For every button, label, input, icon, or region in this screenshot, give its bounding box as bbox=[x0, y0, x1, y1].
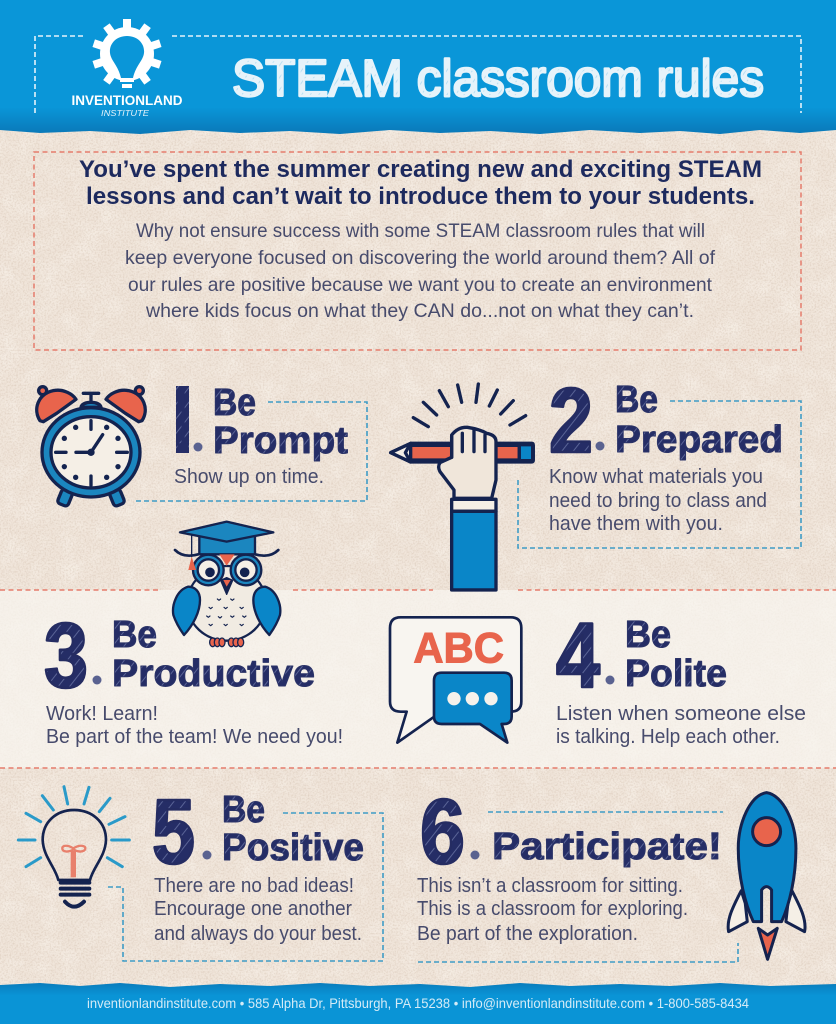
rule 3 heading bbox=[112, 614, 315, 695]
rule 3 heading: Be bbox=[112, 614, 157, 656]
panel: rule 1 bbox=[37, 367, 367, 507]
rule 6 text: Be part of the exploration. bbox=[417, 923, 638, 945]
intro body: where kids focus on what they CAN do...not on what they can’t. bbox=[145, 300, 694, 322]
rule 5 text: and always do your best. bbox=[154, 923, 362, 945]
rule 1 heading: Be bbox=[213, 382, 256, 424]
rule 2 heading: Be bbox=[615, 379, 658, 421]
panel: rule 1: 1 bbox=[176, 367, 189, 474]
logo wordmark: INVENTIONLAND bbox=[72, 92, 182, 108]
intro body: Why not ensure success with some STEAM classroom rules that will bbox=[136, 220, 705, 242]
rule 3 text: Be part of the team! We need you! bbox=[46, 726, 343, 748]
rule 2 numeral: 2 bbox=[549, 370, 593, 472]
rule 4 text: is talking. Help each other. bbox=[556, 726, 780, 748]
intro body: our rules are positive because we want you to create an environment bbox=[128, 274, 713, 296]
section dividers bbox=[0, 590, 836, 768]
rule 6 text: This isn’t a classroom for sitting. bbox=[417, 875, 683, 897]
rule 1 text: Show up on time. bbox=[174, 466, 324, 488]
rule 3 text bbox=[46, 703, 343, 748]
icon: rocket bbox=[728, 793, 805, 959]
intro body: keep everyone focused on discovering the world around them? All of bbox=[125, 247, 716, 269]
rule 6 numeral: 6 bbox=[420, 781, 465, 883]
header banner bbox=[0, 0, 836, 134]
icon: alarm clock bbox=[37, 387, 145, 507]
panel: rule 5 bbox=[18, 781, 383, 961]
rule 1 heading: Prompt bbox=[213, 420, 348, 462]
rule 4 heading: Polite bbox=[625, 653, 727, 695]
icon: owl with graduation cap bbox=[173, 522, 280, 647]
rule 3 text: Work! Learn! bbox=[46, 703, 158, 725]
panel: rule 3 bbox=[44, 605, 343, 748]
rule 5 heading bbox=[222, 789, 364, 869]
rule 5 numeral: 5 bbox=[152, 781, 195, 883]
icon: speech bubbles bbox=[390, 617, 521, 743]
icon: speech bubbles: ABC bbox=[413, 625, 504, 672]
panel: rule 6 bbox=[417, 781, 805, 962]
rule 2 text bbox=[549, 466, 767, 535]
footer band bbox=[0, 983, 836, 1024]
rule 2 text: need to bring to class and bbox=[549, 490, 767, 512]
rule 6 text bbox=[417, 875, 688, 945]
rule 4 heading bbox=[625, 614, 727, 695]
logo: INSTITUTE bbox=[101, 108, 149, 118]
intro body bbox=[125, 220, 716, 322]
rule 5 text: Encourage one another bbox=[154, 898, 352, 920]
rule 5 text bbox=[154, 875, 362, 945]
icon: gear with lightbulb bbox=[92, 19, 162, 88]
rule 5 heading: Be bbox=[222, 789, 265, 831]
rule 5 heading: Positive bbox=[222, 827, 364, 869]
rule 1 numeral bbox=[176, 367, 202, 474]
rule 2 text: Know what materials you bbox=[549, 466, 763, 488]
rule 2 heading bbox=[615, 379, 783, 461]
panel: rule 2 bbox=[391, 370, 801, 590]
title: STEAM classroom rules bbox=[232, 50, 764, 108]
rule 4 text bbox=[556, 703, 806, 748]
rule 4 numeral: 4 bbox=[556, 605, 600, 707]
footer contact text: inventionlandinstitute.com • 585 Alpha Dr, Pittsburgh, PA 15238 • info@inventionlandinstitute.com • 1-800-585-8434 bbox=[87, 995, 749, 1011]
rule 4 text: Listen when someone else bbox=[556, 703, 806, 725]
rule 2 text: have them with you. bbox=[549, 513, 723, 535]
rule 5 text: There are no bad ideas! bbox=[154, 875, 354, 897]
logo bbox=[72, 19, 182, 118]
rule 6 text: This is a classroom for exploring. bbox=[417, 898, 688, 920]
icon: hand holding pencil bbox=[391, 384, 533, 590]
panel: introduction bbox=[34, 152, 801, 350]
header dashed frame bbox=[35, 36, 801, 113]
rule 3 numeral: 3 bbox=[44, 605, 88, 707]
intro heading: lessons and can’t wait to introduce them to your students. bbox=[86, 183, 755, 210]
rule 4 heading: Be bbox=[625, 614, 671, 656]
intro heading bbox=[79, 156, 762, 210]
rule 6 heading: Participate! bbox=[492, 826, 722, 868]
rule 1 heading bbox=[213, 382, 348, 462]
rule 3 heading: Productive bbox=[112, 653, 315, 695]
intro heading: You’ve spent the summer creating new and exciting STEAM bbox=[79, 156, 762, 183]
panel: rule 4 bbox=[390, 605, 806, 748]
icon: light bulb bbox=[18, 787, 129, 907]
rule 2 heading: Prepared bbox=[615, 419, 783, 461]
